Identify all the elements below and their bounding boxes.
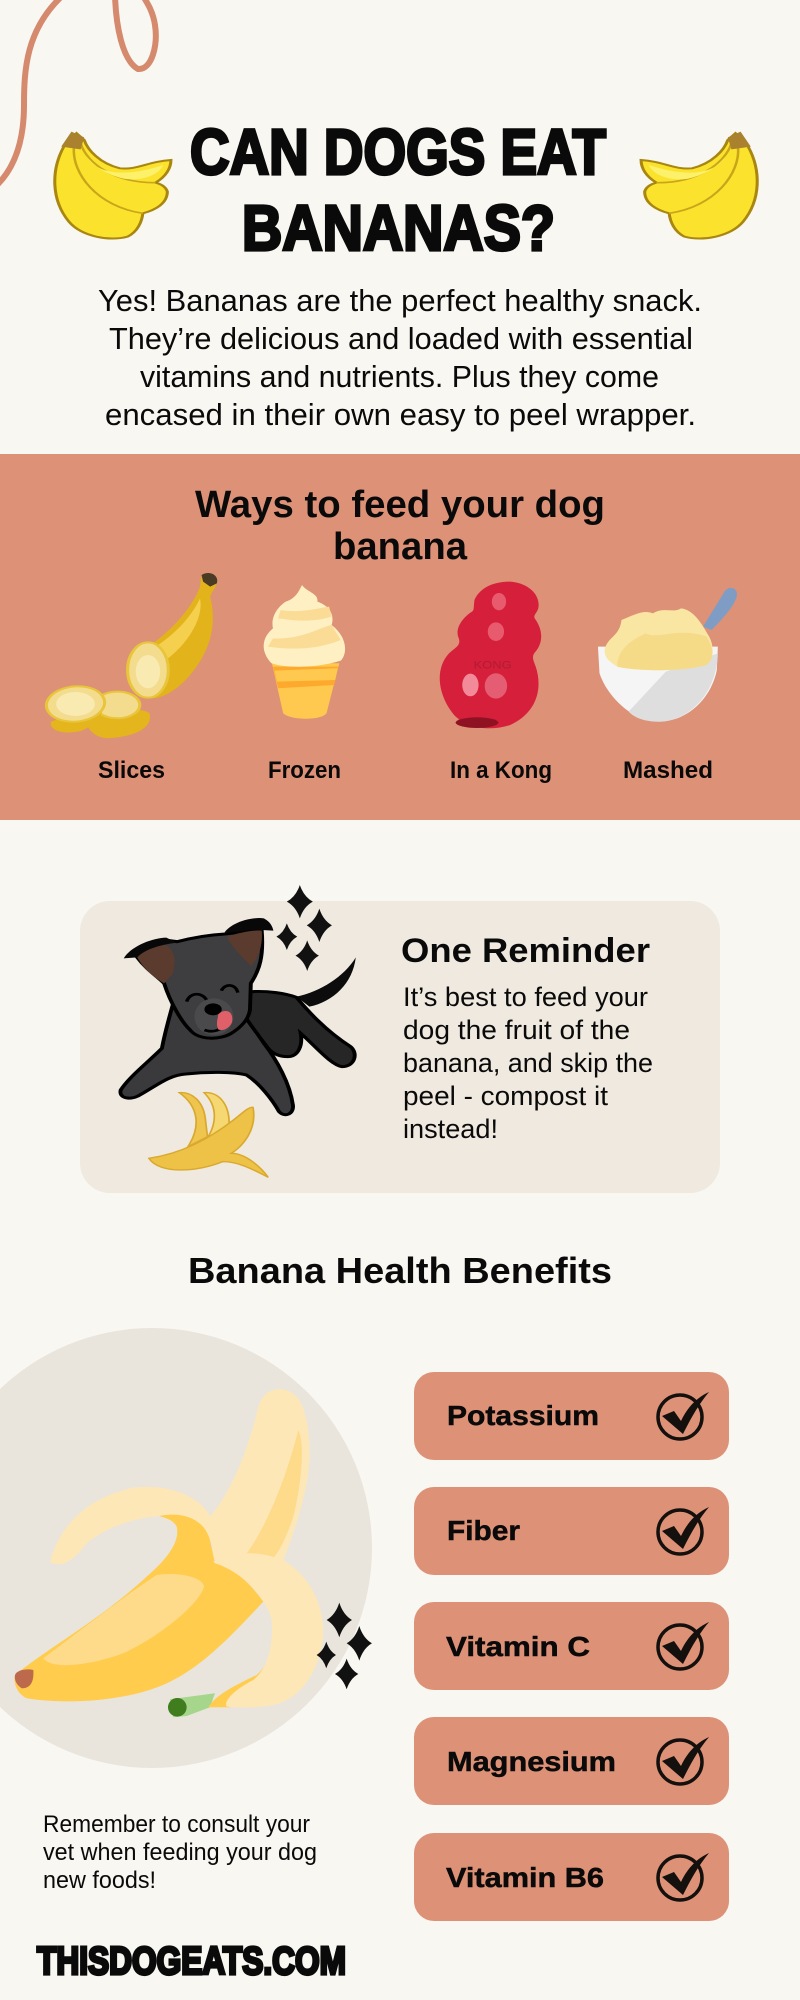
- benefit: fiber: Fiber: [447, 1515, 520, 1546]
- benefit: potassium: [414, 1372, 729, 1460]
- intro text: They’re delicious and loaded with essential: [109, 321, 693, 356]
- intro text: vitamins and nutrients. Plus they come: [140, 359, 659, 394]
- panel: ways to feed: [0, 454, 800, 820]
- benefit: magnesium: [414, 1717, 729, 1805]
- vet note: [43, 1811, 317, 1894]
- intro text: Yes! Bananas are the perfect healthy snack.: [98, 283, 702, 318]
- benefit: magnesium: Magnesium: [447, 1746, 616, 1777]
- icon: banana slices: [37, 573, 217, 738]
- benefit: vitamin b6: [414, 1833, 729, 1921]
- heading: ways to feed: [195, 484, 605, 568]
- reminder text: [403, 982, 653, 1144]
- title: BANANAS?: [242, 192, 555, 264]
- reminder text: It’s best to feed your: [403, 982, 648, 1012]
- heading: banana health benefits: Banana Health Benefits: [188, 1250, 612, 1291]
- decorative leash line: [0, 0, 156, 186]
- benefit: potassium: Potassium: [447, 1400, 599, 1431]
- labels: ways to feed: In a Kong: [450, 757, 552, 784]
- reminder text: instead!: [403, 1114, 498, 1144]
- icon: peeled banana: [15, 1389, 372, 1717]
- icon: red kong toy: [440, 582, 541, 728]
- vet note: Remember to consult your: [43, 1811, 310, 1838]
- intro text: encased in their own easy to peel wrapper.: [105, 397, 696, 432]
- vet note: vet when feeding your dog: [43, 1839, 317, 1866]
- title: [190, 116, 606, 264]
- website footer: THISDOGEATS.COM: [37, 1940, 346, 1983]
- benefit: fiber: [414, 1487, 729, 1575]
- vet note: new foods!: [43, 1867, 156, 1894]
- benefit: vitamin c: Vitamin C: [446, 1631, 590, 1662]
- reminder text: banana, and skip the: [403, 1048, 653, 1078]
- labels: ways to feed: Frozen: [268, 757, 341, 784]
- panel: one reminder: [80, 885, 720, 1193]
- benefit: vitamin c: [414, 1602, 729, 1690]
- heading: ways to feed: Ways to feed your dog: [195, 484, 605, 526]
- labels: ways to feed: [98, 757, 713, 784]
- icon: frozen banana soft serve: [264, 585, 345, 719]
- heading: one reminder: One Reminder: [401, 932, 650, 970]
- intro text: [98, 283, 702, 432]
- illustration circle: [0, 1328, 372, 1768]
- icon: banana bunch left: [55, 132, 171, 239]
- icon: bowl of mashed banana: [598, 588, 737, 722]
- heading: ways to feed: banana: [333, 526, 468, 568]
- icon: red kong toy: KONG: [473, 659, 512, 671]
- benefit: vitamin b6: Vitamin B6: [446, 1862, 604, 1893]
- icon: banana bunch right: [641, 132, 757, 239]
- reminder text: peel - compost it: [403, 1081, 609, 1111]
- reminder text: dog the fruit of the: [403, 1015, 630, 1045]
- icon: dog with sparkles and peel: [120, 885, 356, 1177]
- labels: ways to feed: Mashed: [623, 757, 713, 784]
- labels: ways to feed: Slices: [98, 757, 165, 784]
- title: CAN DOGS EAT: [190, 116, 606, 188]
